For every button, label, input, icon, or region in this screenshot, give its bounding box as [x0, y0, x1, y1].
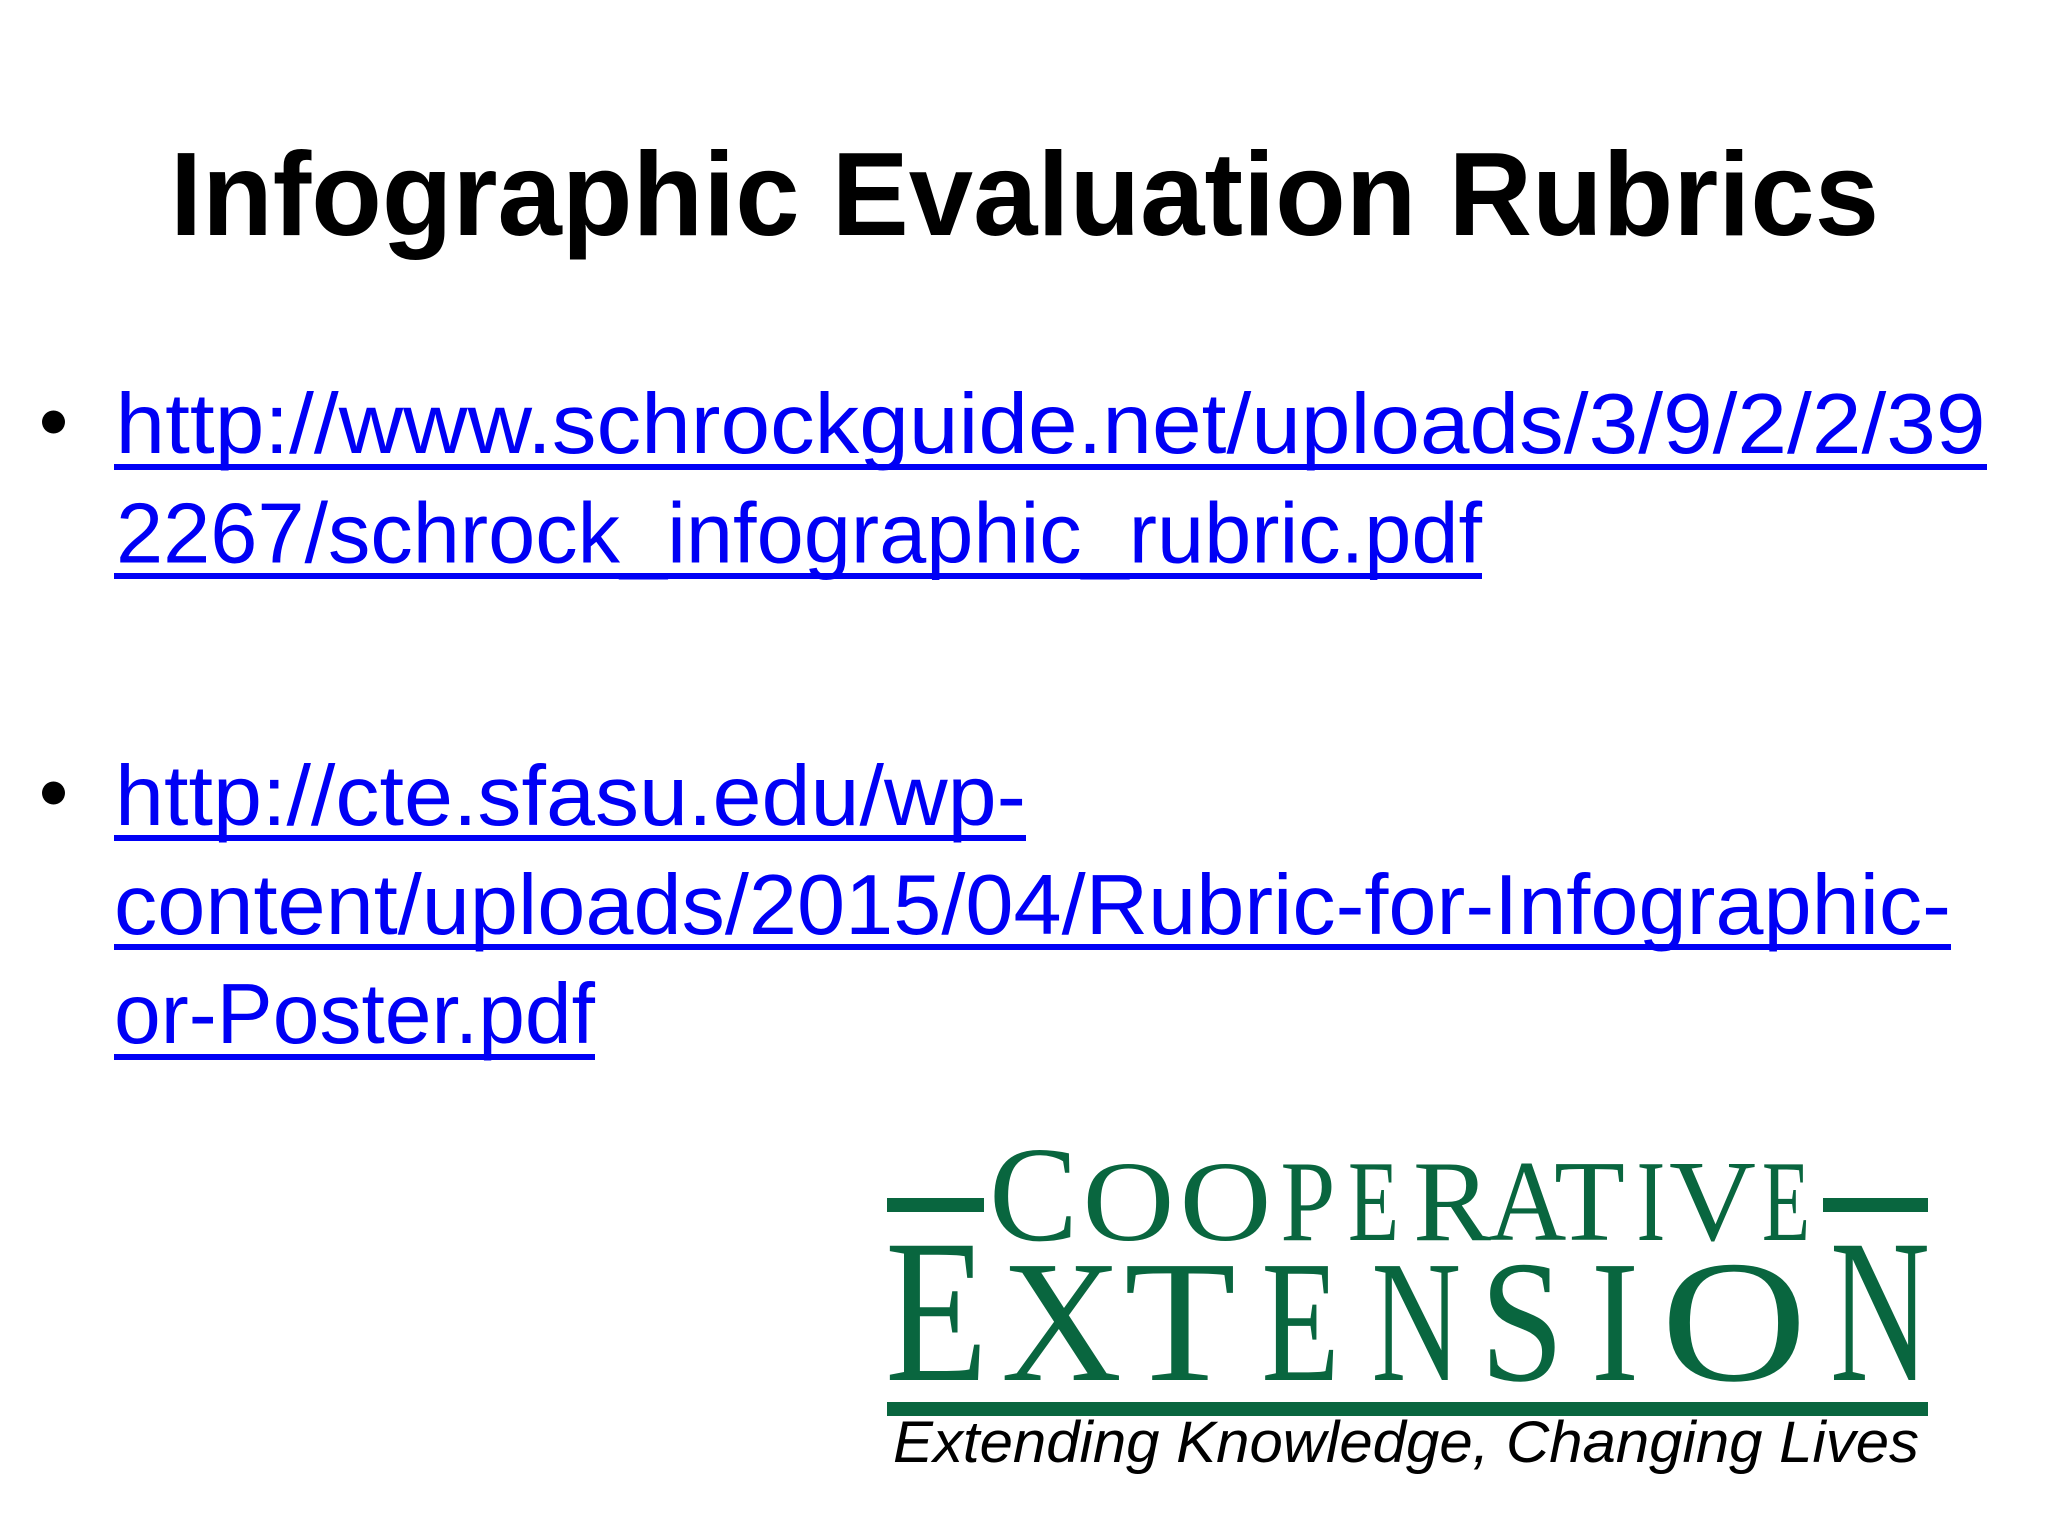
- logo word: Cooperative: C: [989, 1120, 1078, 1270]
- bullet 1: [42, 410, 65, 434]
- logo word: Extension: X: [1001, 1225, 1122, 1418]
- logo word: Extension: [885, 1198, 1930, 1425]
- logo tagline: Extending Knowledge, Changing Lives: [893, 1410, 1919, 1475]
- bullet 2: [42, 782, 65, 804]
- logo word: Cooperative: E: [1348, 1138, 1399, 1265]
- logo word: Cooperative: E: [1762, 1138, 1810, 1265]
- link 2 text line 1: http://cte.sfasu.edu/wp-: [115, 749, 1026, 844]
- logo word: Extension: E: [885, 1198, 988, 1425]
- logo word: Cooperative: O: [1083, 1138, 1174, 1265]
- logo word: Cooperative: A: [1488, 1138, 1566, 1265]
- logo word: Cooperative: V: [1669, 1138, 1756, 1265]
- logo word: Extension: I: [1591, 1225, 1639, 1418]
- logo word: Extension: N: [1830, 1198, 1930, 1425]
- logo: Cooperative Extension: [885, 1120, 1930, 1475]
- link list item 2: [42, 749, 1951, 1062]
- logo word: Cooperative: I: [1636, 1138, 1665, 1265]
- link 1 text line 1: http://www.schrockguide.net/uploads/3/9/2/2/39: [116, 377, 1986, 472]
- link list item 1: [42, 377, 1987, 582]
- logo word: Extension: O: [1661, 1225, 1807, 1418]
- logo word: Extension: E: [1262, 1225, 1340, 1418]
- logo word: Cooperative: O: [1180, 1138, 1271, 1265]
- link 1 text line 2: 2267/schrock_infographic_rubric.pdf: [116, 486, 1482, 582]
- logo word: Cooperative: P: [1280, 1138, 1335, 1265]
- link 2 text line 2: content/uploads/2015/04/Rubric-for-Infographic-: [114, 858, 1951, 953]
- logo word: Cooperative: T: [1554, 1138, 1625, 1265]
- logo word: Cooperative: [989, 1120, 1810, 1270]
- logo word: Extension: T: [1124, 1225, 1236, 1418]
- logo word: Extension: S: [1480, 1225, 1564, 1418]
- logo word: Extension: N: [1372, 1225, 1461, 1418]
- logo word: Cooperative: R: [1413, 1138, 1491, 1265]
- link 2 text line 3: or-Poster.pdf: [114, 967, 595, 1062]
- logo rule: [887, 1402, 1928, 1416]
- title: Infographic Evaluation Rubrics: [170, 128, 1879, 261]
- logo side bars: [887, 1198, 1928, 1212]
